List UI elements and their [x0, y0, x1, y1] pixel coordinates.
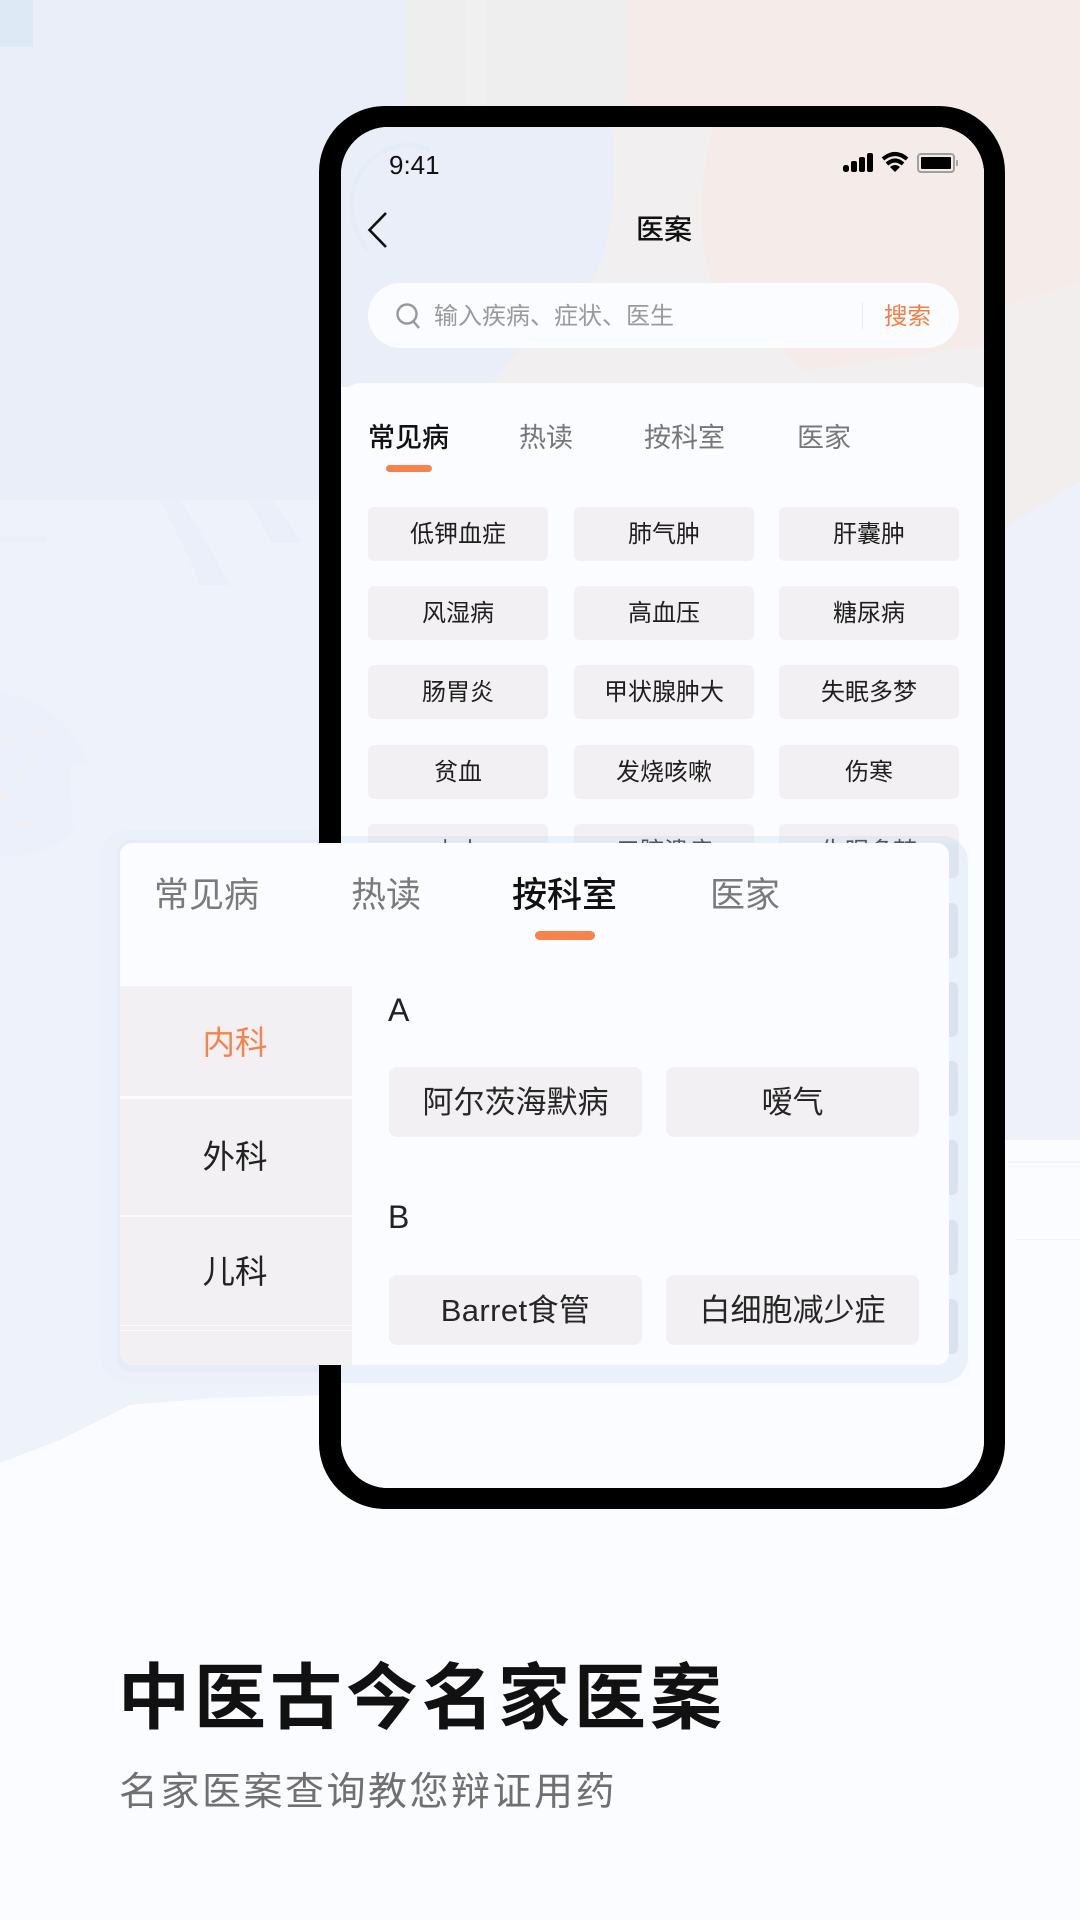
- peeking chip: [939, 982, 958, 1037]
- chip: Barrett esophagus: [389, 1275, 642, 1345]
- chip: Alzheimer's: [389, 1067, 642, 1137]
- tab: hot reads: 热读: [519, 423, 573, 453]
- chip grid: 肝囊肿: [833, 521, 905, 548]
- chip grid: 肠胃炎: [422, 679, 494, 706]
- search divider: [862, 302, 863, 329]
- peeking chip: [939, 903, 958, 958]
- sidebar: internal medicine: 内科: [202, 1025, 268, 1061]
- chip: belching: 嗳气: [762, 1084, 824, 1120]
- tab: doctors: 医家: [797, 423, 851, 453]
- card tab: by department active: 按科室: [512, 876, 617, 915]
- chip grid: 贫血: [434, 759, 482, 786]
- card shadow over screen: [300, 836, 968, 1383]
- sidebar divider: [120, 1330, 352, 1331]
- card shadow right of phone edge: [327, 1365, 347, 1383]
- chip grid: 肺气肿: [628, 521, 700, 548]
- section letter A: A: [388, 992, 409, 1028]
- chip grid: [368, 507, 959, 877]
- chip: Barrett esophagus: Barret食管: [441, 1292, 590, 1328]
- chip grid: 低钾血症: [410, 521, 506, 548]
- chip grid: 甲状腺肿大: [604, 679, 724, 706]
- chip: Alzheimer's: 阿尔茨海默病: [422, 1084, 608, 1120]
- sidebar divider: [120, 1096, 352, 1099]
- panel: common disease list: [341, 383, 984, 1488]
- chip grid: 失眠多梦: [821, 838, 917, 865]
- sidebar: pediatrics: 儿科: [202, 1254, 268, 1290]
- chip: leukopenia: [666, 1275, 919, 1345]
- chip grid: 伤寒: [845, 759, 893, 786]
- card shadow on background: [100, 830, 327, 1383]
- card tab: doctors: 医家: [710, 876, 780, 915]
- icon: search: [396, 303, 420, 329]
- card tab: common diseases: 常见病: [154, 876, 259, 915]
- chip grid: 风湿病: [422, 600, 494, 627]
- phone frame: [319, 106, 1005, 1509]
- tab underline: [386, 465, 432, 472]
- chip grid: 失眠多梦: [821, 679, 917, 706]
- peeking chip: [939, 824, 958, 878]
- search bar: [368, 283, 959, 348]
- chip grid: 高血压: [628, 600, 700, 627]
- status icons: signal, wifi, battery: [843, 152, 958, 173]
- back arrow: [368, 212, 387, 248]
- chip grid: 上火: [434, 838, 482, 865]
- tab: by department: 按科室: [644, 423, 725, 453]
- chip: belching: [666, 1067, 919, 1137]
- sidebar divider: [120, 1215, 352, 1217]
- department sidebar: [120, 986, 352, 1365]
- peeking chip: [939, 1140, 958, 1195]
- main heading: 中医古今名家医案: [118, 1659, 726, 1739]
- card tab underline: [535, 931, 595, 940]
- card shadow contact strip on background: [117, 840, 327, 1372]
- search placeholder: 输入疾病、症状、医生: [434, 303, 674, 330]
- tab: common diseases: 常见病: [368, 423, 449, 453]
- search button: 搜索: [884, 303, 931, 329]
- floating card: by department: [120, 843, 949, 1365]
- screen background shapes: [341, 127, 984, 387]
- chip grid: 发烧咳嗽: [616, 759, 712, 786]
- sidebar: surgery: 外科: [202, 1139, 268, 1175]
- peeking chip: [939, 1220, 958, 1275]
- peeking chip: [939, 1299, 958, 1354]
- status bar time: 9:41: [389, 150, 440, 180]
- peeking chip: [939, 1061, 958, 1116]
- phone screen: [341, 127, 984, 1488]
- chip grid: 口腔溃疡: [616, 838, 712, 865]
- sidebar divider: [120, 1325, 352, 1326]
- subheading: 名家医案查询教您辩证用药: [119, 1771, 617, 1814]
- screen title: 医案: [636, 214, 692, 245]
- card tab: hot reads: 热读: [351, 876, 421, 915]
- chip grid: 糖尿病: [833, 600, 905, 627]
- section letter B: B: [388, 1199, 409, 1235]
- chip: leukopenia: 白细胞减少症: [700, 1292, 886, 1328]
